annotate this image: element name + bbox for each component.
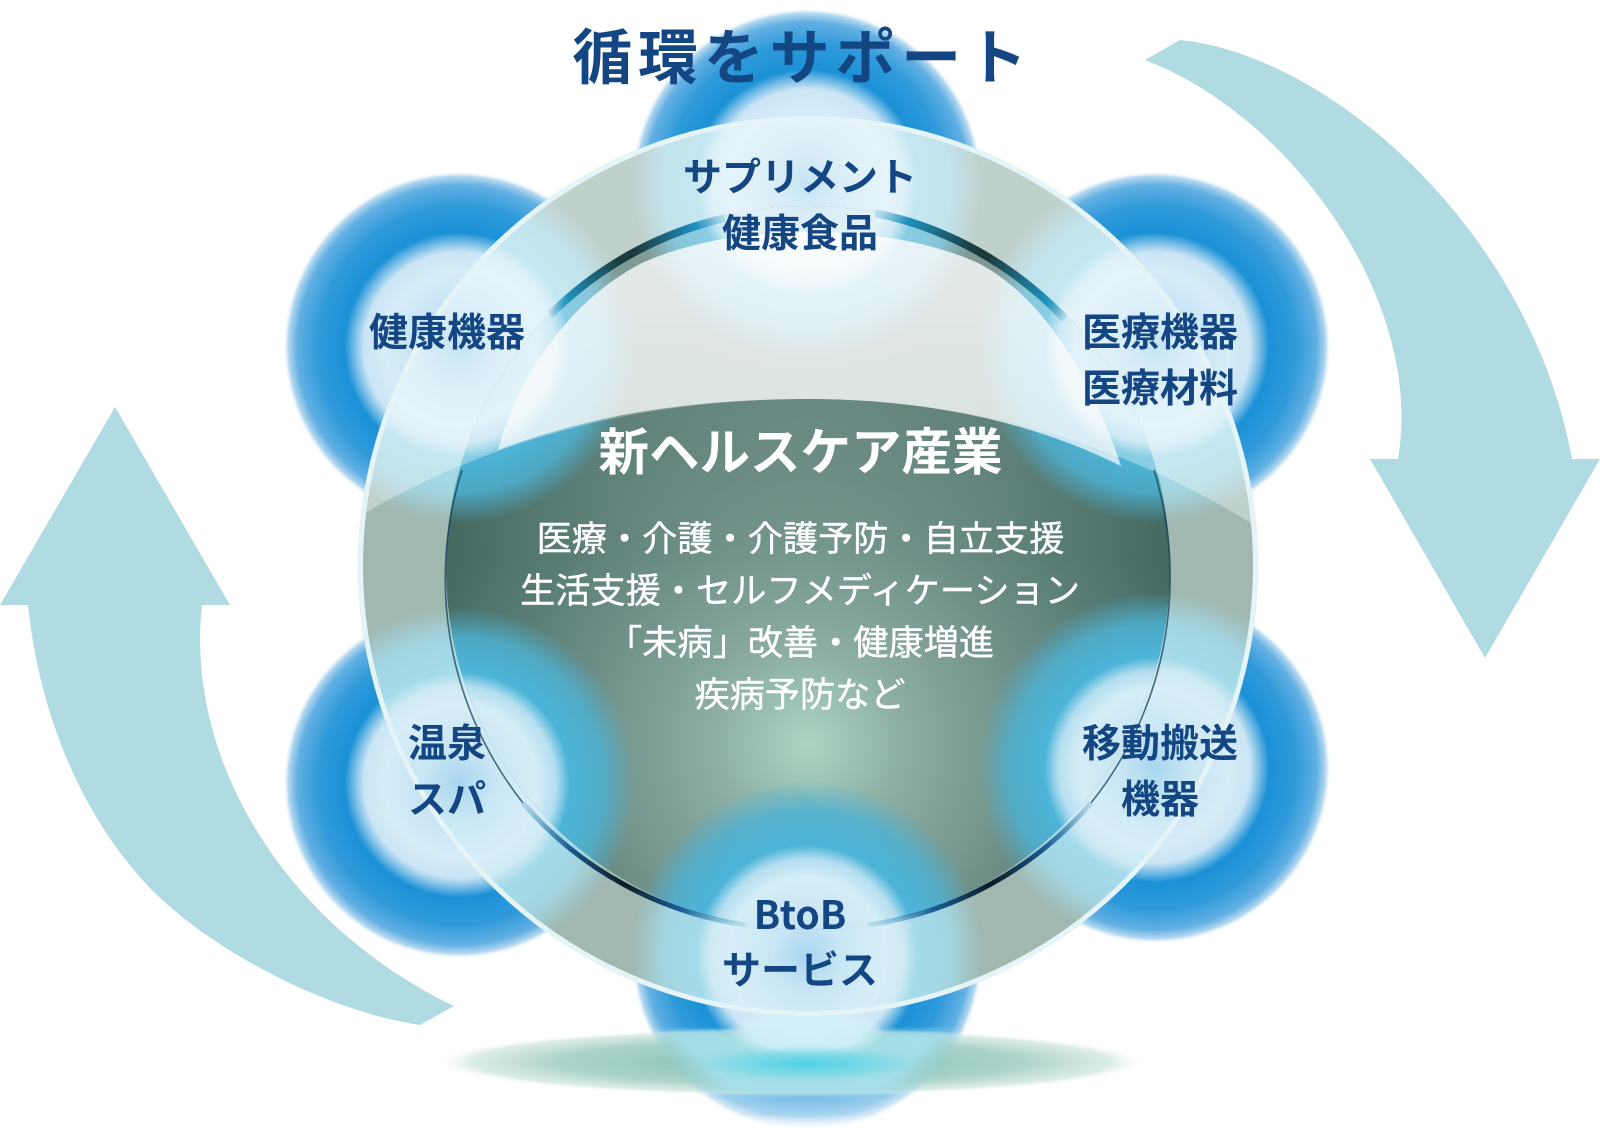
label: hot springs and spa: スパ [408,769,486,825]
glass ring base [358,116,1258,1016]
upper glass highlight [366,121,1251,523]
text block: industry description [520,511,1080,718]
label: hot springs and spa: 温泉 [408,713,486,769]
inner core disc [446,206,1170,930]
label: mobility equipment: 機器 [1121,769,1199,825]
label: hot springs and spa [408,713,486,825]
label: mobility equipment [1082,713,1238,825]
label: supplements and health food: 健康食品 [722,203,878,259]
text block: industry description: 生活支援・セルフメディケーション [520,563,1080,614]
dome highlight [498,232,1121,466]
label: medical devices and materials [1082,302,1238,414]
label: supplements and health food: サプリメント [683,147,917,203]
outer blue glow circles [283,8,1331,1132]
label: medical devices and materials: 医療機器 [1082,302,1238,358]
text block: industry description: 疾病予防など [694,667,906,718]
heading: new healthcare industry: 新ヘルスケア産業 [598,411,1002,485]
label: BtoB services: BtoB [754,885,846,941]
label: mobility equipment: 移動搬送 [1082,713,1238,769]
inner disc edge [445,213,1170,925]
label: BtoB services [722,885,878,996]
ground shadow ellipse [452,1026,1130,1130]
outer glass rim [360,118,1256,1014]
arrow: left upward curved arrow [0,407,454,1025]
label: supplements and health food [683,147,917,259]
arrow: right downward curved arrow [1145,40,1600,658]
label: medical devices and materials: 医療材料 [1082,358,1238,414]
title: 循環をサポート [572,10,1033,97]
ring glow circles [368,116,1250,1016]
label: BtoB services: サービス [722,940,878,996]
label: health devices: 健康機器 [369,302,525,358]
text block: industry description: 「未病」改善・健康増進 [607,615,994,666]
text block: industry description: 医療・介護・介護予防・自立支援 [537,511,1064,562]
